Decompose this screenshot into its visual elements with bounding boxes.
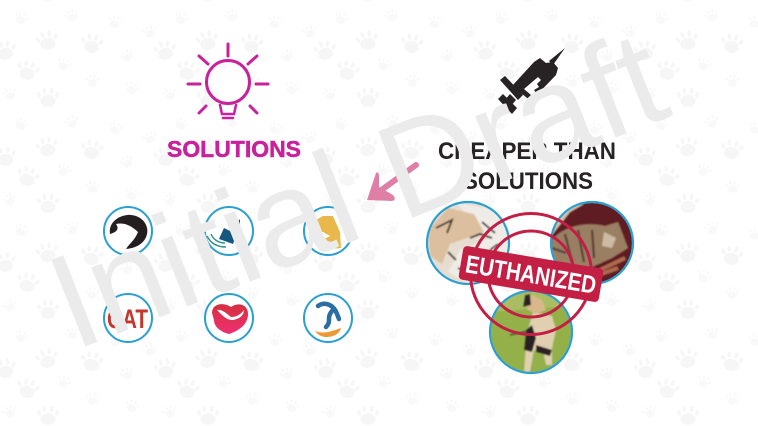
stamp: euthanized: EUTHANIZED: [463, 250, 598, 300]
logo: yellow hand: [304, 207, 352, 255]
heading: cheaper than solutions: CHEAPER THAN: [438, 138, 616, 165]
heading: cheaper than solutions: SOLUTIONS: [463, 168, 593, 195]
logo: red CAT lettering: [104, 294, 152, 342]
logo: red heart with hands: [205, 294, 253, 342]
icon: light bulb: [188, 44, 268, 118]
heading: solutions: SOLUTIONS: [167, 136, 301, 162]
watermark: initial draft: Initial Draft: [29, 1, 685, 378]
logo: red CAT lettering: CAT: [107, 304, 148, 334]
photo: injured cat: [426, 201, 510, 285]
photo: dog on grass: [488, 289, 574, 375]
icon: syringe: [498, 48, 565, 114]
arrow: from cheaper options to solutions: [367, 165, 416, 201]
logo: black seal: [104, 207, 152, 255]
heading: cheaper than solutions: [438, 138, 616, 195]
logo: blue dolphin over orange hand: [304, 294, 352, 342]
solution logos grid: [104, 207, 352, 342]
stamp: euthanized: [458, 214, 604, 334]
photo: tabby cat: [551, 202, 633, 284]
logo: blue dog and waves: [205, 207, 253, 255]
